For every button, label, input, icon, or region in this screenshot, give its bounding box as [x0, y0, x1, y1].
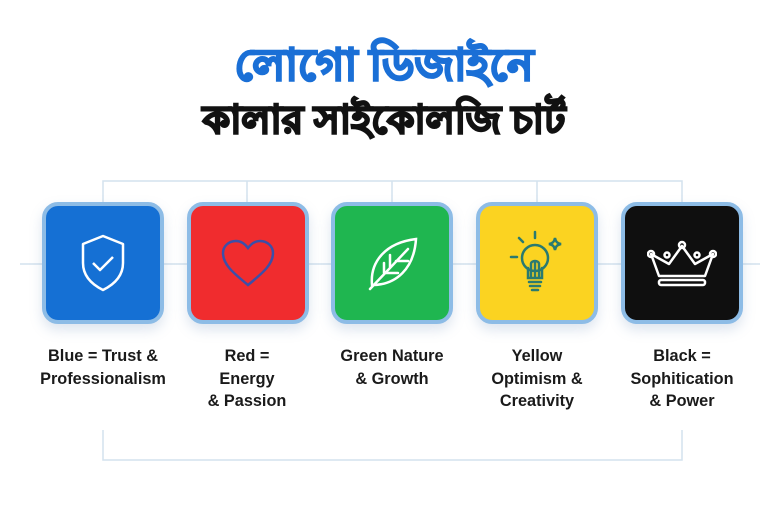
- label: green: [340, 347, 444, 388]
- icon: shield: [82, 234, 124, 292]
- label: red: [208, 347, 286, 410]
- card: green: [331, 202, 453, 324]
- title line 2: কালার সাইকোলজি চার্ট: [203, 99, 565, 142]
- label: blue: Blue = Trust &: [48, 347, 158, 365]
- icon: crown: [647, 240, 717, 286]
- icon: heart: [222, 240, 274, 287]
- label: green: Green Nature: [340, 347, 444, 365]
- title line 1: লোগো ডিজাইনে: [235, 41, 533, 90]
- label: red: Energy: [219, 370, 275, 388]
- label: yellow: Creativity: [500, 392, 574, 410]
- label: blue: [40, 347, 166, 388]
- label: green: & Growth: [355, 370, 429, 388]
- label: black: & Power: [649, 392, 715, 410]
- label: yellow: Yellow: [512, 347, 562, 365]
- icon: leaf: [368, 238, 418, 290]
- label: yellow: [491, 347, 583, 410]
- label: black: Sophitication: [630, 370, 734, 388]
- label: black: [630, 347, 734, 410]
- card: black: [621, 202, 743, 324]
- card: yellow: [476, 202, 598, 324]
- card: red: [187, 202, 309, 324]
- icon: lightbulb: [510, 230, 562, 292]
- label: blue: Professionalism: [40, 370, 166, 388]
- label: red: Red =: [225, 347, 269, 365]
- label: yellow: Optimism &: [491, 370, 583, 388]
- card: blue: [42, 202, 164, 324]
- label: black: Black =: [653, 347, 711, 365]
- label: red: & Passion: [208, 392, 286, 410]
